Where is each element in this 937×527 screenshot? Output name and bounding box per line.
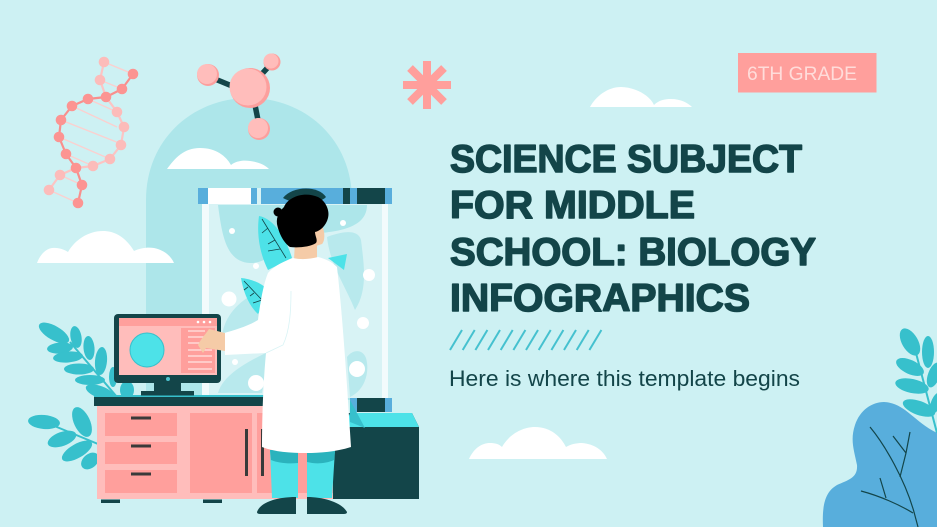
title: SCHOOL: BIOLOGY	[450, 231, 816, 274]
asterisk icon	[403, 61, 451, 109]
bubbles	[222, 220, 375, 391]
lab coat	[224, 257, 351, 453]
hair	[274, 188, 329, 247]
cloud: left	[37, 231, 174, 263]
dome backdrop	[146, 98, 352, 400]
badge: grade	[738, 53, 876, 92]
leaf: upper	[258, 216, 292, 270]
cloud: top right	[590, 87, 692, 107]
legs	[270, 450, 335, 498]
plant: upper left	[36, 318, 134, 403]
tank posts	[202, 204, 388, 398]
DNA helix	[44, 57, 138, 208]
cloud: inside dome	[167, 148, 269, 169]
scientist	[198, 188, 351, 514]
badge: grade: 6TH GRADE	[747, 64, 857, 85]
plant: bottom right leaves	[893, 325, 937, 433]
neck	[294, 240, 317, 260]
coat sleeve fold	[266, 291, 291, 353]
ear and face	[312, 222, 324, 246]
computer monitor	[114, 314, 221, 396]
cloud: bottom	[469, 427, 607, 459]
hand	[198, 329, 225, 353]
leaf: right	[328, 254, 347, 270]
tank bottom bar	[350, 398, 392, 412]
plant: blue bush	[823, 402, 937, 527]
title	[450, 138, 816, 320]
drawers	[105, 413, 177, 493]
tank top bar	[198, 188, 392, 204]
molecule icon	[197, 54, 280, 140]
handles	[131, 416, 264, 476]
lab desk	[94, 395, 333, 503]
doors	[190, 413, 333, 493]
shoes	[257, 497, 347, 514]
title: INFOGRAPHICS	[450, 277, 750, 320]
title: FOR MIDDLE	[450, 184, 695, 227]
leaf: lower	[241, 278, 270, 314]
teal box	[333, 400, 419, 499]
desk feet	[101, 500, 222, 503]
subtitle: Here is where this template begins	[449, 366, 800, 391]
decorative slashes	[450, 330, 601, 350]
plant: lower left	[27, 404, 102, 473]
glass tank	[198, 188, 392, 412]
title: SCIENCE SUBJECT	[450, 138, 802, 181]
